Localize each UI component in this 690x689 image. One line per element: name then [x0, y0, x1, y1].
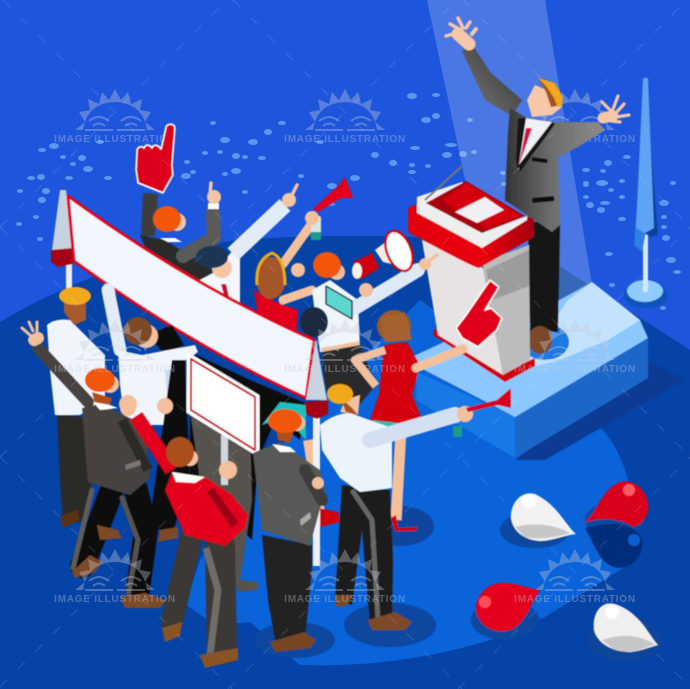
dark circular floor [0, 236, 690, 689]
back crowd: woman in red [254, 177, 353, 338]
balloon white left [511, 493, 576, 541]
back crowd: navy hair man [196, 185, 297, 305]
balloon red bottom [476, 583, 540, 631]
balloon white right [594, 603, 658, 652]
sign [188, 354, 258, 455]
watermark row 1: IMAGE ILLUSTRATION [284, 134, 406, 145]
podium inner top [426, 181, 525, 233]
podium [408, 166, 535, 382]
gray suit man [253, 409, 335, 658]
lighter floor pool [185, 300, 628, 665]
confetti spots [16, 85, 681, 310]
watermark row 1: IMAGE ILLUSTRATION [54, 134, 176, 145]
back crowd: megaphone man [300, 227, 437, 352]
speaker [446, 18, 629, 354]
tablet [326, 286, 352, 319]
speaker left arm [462, 44, 522, 116]
crowd behind banner [190, 345, 376, 540]
center woman in red dress [355, 310, 463, 546]
podium microphone [425, 166, 462, 200]
red sweater man [119, 395, 248, 668]
center brown hair man [108, 290, 198, 540]
red horn [313, 177, 353, 212]
banner with poles [51, 190, 314, 398]
red foam hand held up [136, 124, 175, 193]
left man white shirt [22, 287, 105, 528]
stage platform [405, 282, 684, 460]
speaker legs [528, 222, 560, 332]
speaker jacket [505, 108, 605, 232]
watermark rows 2 and 3 [54, 319, 636, 605]
watermark rows 2 and 3: IMAGE ILLUSTRATION [54, 594, 176, 605]
watermark rows 2 and 3: IMAGE ILLUSTRATION [54, 364, 176, 375]
speaker left hand [446, 18, 476, 44]
balloon red back [583, 481, 648, 527]
balloons [471, 481, 663, 662]
red horn [466, 388, 511, 412]
black suit man [72, 368, 178, 608]
foam hand on podium [456, 280, 502, 347]
watermark row 1 [54, 89, 636, 145]
watermark rows 2 and 3: IMAGE ILLUSTRATION [284, 594, 406, 605]
speaker shirt and tie [518, 118, 552, 170]
watermark rows 2 and 3: IMAGE ILLUSTRATION [514, 364, 636, 375]
black suit man legs [73, 490, 146, 596]
watermark row 1: IMAGE ILLUSTRATION [514, 134, 636, 145]
flag pole marker [624, 78, 668, 308]
speaker right hand [602, 96, 629, 122]
horn white shirt man [320, 384, 511, 647]
bottle [311, 216, 321, 240]
watermark rows 2 and 3: IMAGE ILLUSTRATION [514, 594, 636, 605]
podium red collar [408, 204, 534, 268]
sign post [221, 435, 228, 485]
sign pole right [305, 340, 328, 566]
podium paper [455, 197, 504, 223]
watermark rows 2 and 3: IMAGE ILLUSTRATION [284, 364, 406, 375]
megaphone [352, 227, 418, 297]
balloon navy [585, 524, 642, 568]
speaker head [527, 85, 562, 117]
sign bearer and sign [188, 354, 258, 592]
spotlight beam [427, 0, 602, 345]
back crowd: foam hand man [136, 124, 221, 290]
podium white box [417, 182, 527, 248]
